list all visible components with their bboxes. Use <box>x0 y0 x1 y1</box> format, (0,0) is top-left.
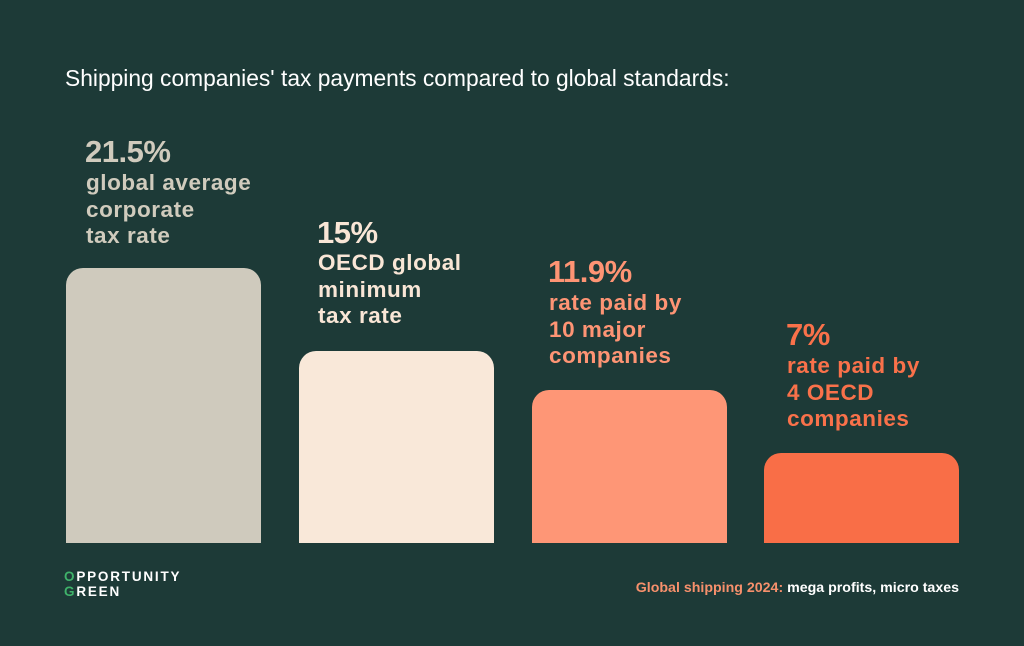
title: Shipping companies' tax payments compared to global standards: <box>65 65 730 91</box>
figure: 21.5%: 21.5% <box>85 134 170 169</box>
bar: OECD minimum <box>299 351 494 543</box>
label: 10 major companies: companies <box>549 343 672 368</box>
label: 10 major companies <box>549 290 682 368</box>
label: OECD minimum: minimum <box>318 276 422 302</box>
label: OECD minimum: tax rate <box>318 303 402 328</box>
footer tagline: Global shipping 2024: mega profits, micro taxes <box>636 580 959 596</box>
bar: 4 OECD companies <box>764 453 959 543</box>
label: 10 major companies: 10 major <box>549 316 646 342</box>
label: 4 OECD companies <box>787 353 920 431</box>
figure: 11.9%: 11.9% <box>548 254 632 289</box>
label: global average: tax rate <box>86 223 170 248</box>
label: global average: global average <box>86 170 251 195</box>
figure: 15%: 15% <box>317 215 378 250</box>
logo: OPPORTUNITY <box>64 569 181 584</box>
label: 10 major companies: rate paid by <box>549 290 682 315</box>
label: OECD minimum: OECD global <box>318 250 462 275</box>
logo: GREEN <box>64 584 121 598</box>
label: global average: corporate <box>86 196 195 222</box>
label: 4 OECD companies: rate paid by <box>787 353 920 378</box>
label: 4 OECD companies: companies <box>787 406 910 431</box>
label: OECD minimum <box>318 250 462 328</box>
logo <box>64 569 181 598</box>
figure: 7%: 7% <box>786 317 830 352</box>
bar: global average <box>66 268 261 543</box>
label: 4 OECD companies: 4 OECD <box>787 380 874 404</box>
label: global average <box>86 170 251 248</box>
bar: 10 major companies <box>532 390 727 543</box>
